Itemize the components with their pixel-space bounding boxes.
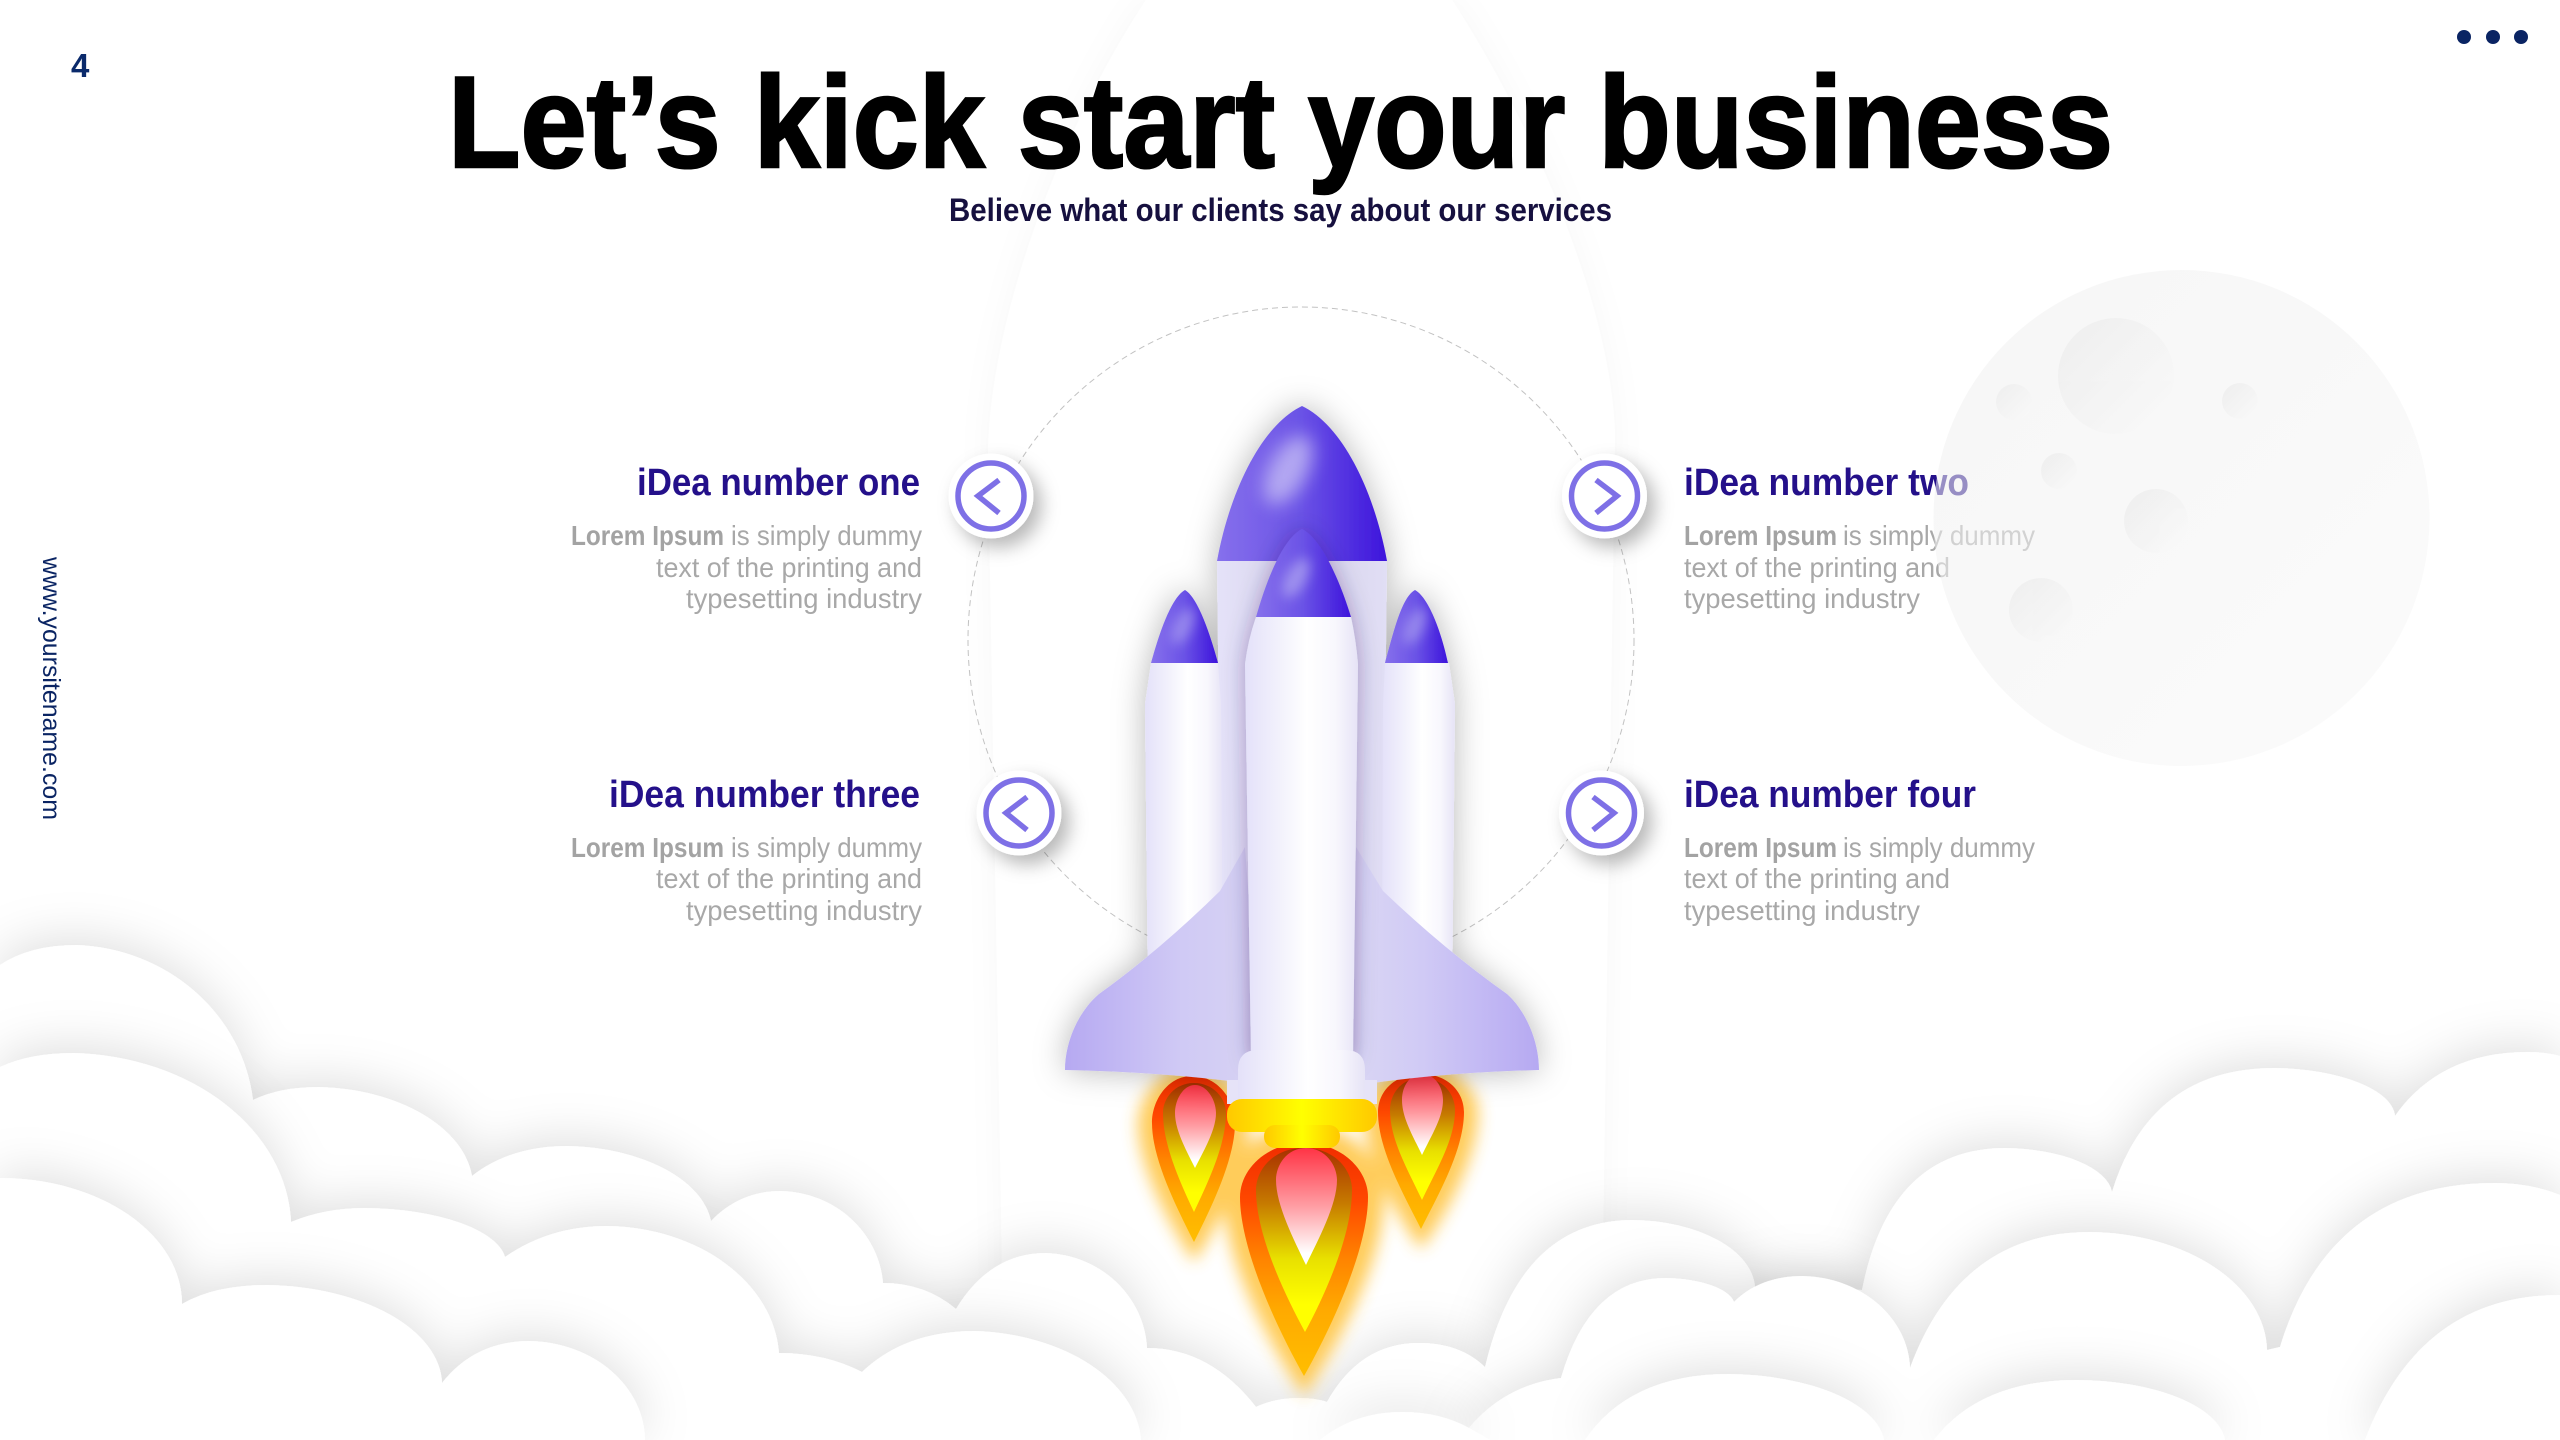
- right wing: [1345, 847, 1539, 1084]
- button: idea three: [976, 770, 1062, 856]
- body: idea four: text of the printing and: [1684, 863, 1950, 894]
- fuselage nose: [1256, 529, 1351, 617]
- nose highlight: centre: [1277, 554, 1315, 602]
- idea three: [571, 774, 922, 926]
- body: idea one: is simply dummy: [731, 520, 922, 551]
- menu dots: [2457, 30, 2528, 44]
- cloud overlap patch: [1320, 1343, 1486, 1440]
- flame glow: [1138, 1064, 1478, 1396]
- cloud: middle right: [1445, 1183, 2560, 1440]
- body: idea one: typesetting industry: [686, 583, 922, 614]
- body: idea one: text of the printing and: [656, 552, 922, 583]
- title: Let’s kick start your business: [448, 49, 2113, 195]
- body: idea four: typesetting industry: [1684, 895, 1920, 926]
- big rear body: [1217, 561, 1387, 900]
- right booster body: [1382, 663, 1455, 1000]
- left wing: [1065, 847, 1260, 1082]
- yellow nozzle band: [1227, 1099, 1377, 1132]
- nose highlight: left booster: [1166, 604, 1200, 648]
- big rear nose: [1217, 406, 1387, 561]
- body: idea two: is simply dummy: [1843, 520, 2035, 551]
- button: idea two: [1562, 454, 1647, 538]
- nose highlight: right booster: [1398, 604, 1432, 648]
- clouds: [0, 945, 2560, 1440]
- vertical website text: www.yoursitename.com: [37, 556, 65, 820]
- cloud: front centre: [1320, 1412, 1490, 1440]
- cloud: front left: [0, 1178, 645, 1440]
- moon craters: [1996, 318, 2258, 642]
- heading: idea four: iDea number four: [1684, 774, 1976, 816]
- flame: right: [1378, 1074, 1464, 1229]
- body: idea two: typesetting industry: [1684, 583, 1920, 614]
- heading: idea three: iDea number three: [609, 774, 920, 816]
- cloud: back right: [1485, 1052, 2560, 1440]
- cloud: middle left: [0, 1053, 1141, 1440]
- body: idea two: Lorem Ipsum: [1684, 520, 1837, 551]
- heading: idea one: iDea number one: [637, 462, 920, 504]
- button: idea four: [1559, 770, 1644, 856]
- body: idea four: is simply dummy: [1843, 832, 2035, 863]
- body: idea one: Lorem Ipsum: [571, 520, 724, 551]
- body: idea three: typesetting industry: [686, 895, 922, 926]
- flame: left: [1152, 1076, 1235, 1242]
- cloud: front right: [1585, 1295, 2560, 1440]
- nose highlight: rear: [1253, 428, 1323, 512]
- body: idea two: text of the printing and: [1684, 552, 1950, 583]
- heading: idea two: iDea number two: [1684, 462, 1969, 504]
- button: idea one: [948, 454, 1034, 538]
- dashed orbit circle: [968, 307, 1634, 973]
- flame: centre: [1240, 1143, 1368, 1376]
- idea one: [571, 462, 922, 614]
- flames: [1138, 1064, 1478, 1396]
- cloud: back left: [0, 945, 1485, 1440]
- slide number: 4: [71, 47, 90, 84]
- ghost rocket silhouette: [988, 0, 1615, 1440]
- fuselage body: [1245, 617, 1358, 1060]
- rocket: [1065, 406, 1539, 1148]
- engine collar: [1238, 1050, 1365, 1100]
- idea two: [1684, 462, 2035, 614]
- left booster body: [1145, 663, 1223, 1000]
- right booster nose: [1385, 590, 1448, 663]
- left booster nose: [1151, 590, 1218, 663]
- rocket back parts: [1065, 406, 1539, 1084]
- exhaust stubs: [1227, 1080, 1377, 1104]
- subtitle: Believe what our clients say about our services: [949, 192, 1612, 228]
- body: idea three: text of the printing and: [656, 863, 922, 894]
- moon: [1934, 270, 2430, 766]
- body: idea three: Lorem Ipsum: [571, 832, 724, 863]
- body: idea four: Lorem Ipsum: [1684, 832, 1837, 863]
- body: idea three: is simply dummy: [731, 832, 922, 863]
- idea four: [1684, 774, 2035, 926]
- yellow small nozzle: [1264, 1125, 1340, 1148]
- centre fuselage: [1245, 529, 1358, 1060]
